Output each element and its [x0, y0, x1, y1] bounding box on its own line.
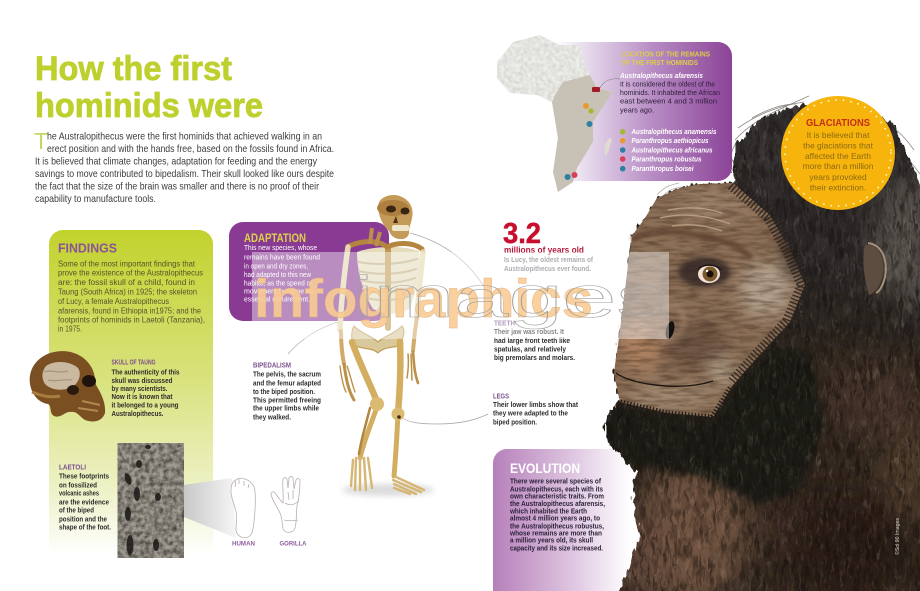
- species legend: Australopithecus anamensis: [631, 129, 717, 136]
- callout: glaciations: the glaciations that: [803, 140, 874, 150]
- legs caption: [493, 394, 578, 426]
- callout: glaciations: affected the Earth: [805, 151, 871, 161]
- Laetoli caption: on fossilized: [59, 480, 97, 490]
- 3.2 million years callout: Is Lucy, the oldest remains of: [504, 255, 593, 264]
- ribcage: [357, 247, 420, 328]
- findings text: are: the fossil skull of a child, found in: [58, 278, 195, 287]
- species legend: Paranthropus boisei: [632, 166, 694, 173]
- findings text: footprints of hominids in Laetoli (Tanzania),: [58, 316, 205, 324]
- skull of Taung caption: it belonged to a young: [112, 400, 179, 410]
- afarensis note: hominids. It inhabited the African: [620, 88, 720, 97]
- callout: glaciations: their extinction.: [810, 182, 866, 192]
- skull of Taung caption: SKULL OF TAUNG: [112, 360, 156, 366]
- adaptation text: essential requirement.: [244, 294, 310, 304]
- pelvis: [352, 326, 404, 353]
- adaptation text: had adapted to this new: [244, 270, 311, 279]
- findings text: afarensis, found in Ethiopia in1975; and the: [58, 306, 202, 316]
- skull of Taung caption: skull was discussed: [112, 376, 173, 385]
- afarensis note: [619, 71, 720, 114]
- species legend: Paranthropus aethiopicus: [632, 138, 709, 145]
- evolution text: almost 4 million years ago, to: [510, 514, 600, 522]
- ear: [863, 243, 886, 295]
- evolution text: [509, 476, 605, 552]
- findings text: [58, 260, 205, 334]
- findings heading: FINDINGS: [58, 240, 117, 256]
- beard and dark neck: [600, 345, 825, 505]
- adaptation text: [244, 243, 320, 304]
- Laetoli caption: position and the: [59, 514, 107, 524]
- skull of Taung caption: [112, 360, 180, 418]
- face skin: [614, 183, 805, 417]
- adaptation text: in open and dry zones,: [244, 262, 308, 270]
- beard fringe over the chin: [620, 387, 733, 419]
- findings text: prove the existence of the Australopithecus: [58, 268, 203, 278]
- adaptation text: This new species, whose: [244, 243, 317, 252]
- foot and hand labels: [232, 540, 307, 548]
- evolution text: Australopithecus, each with its: [510, 484, 603, 494]
- foot and hand labels: HUMAN: [232, 540, 255, 548]
- afarensis note: It is considered the oldest of the: [620, 80, 715, 88]
- findings text: of Lucy, a female Australopithecus: [58, 297, 169, 306]
- map heading: [621, 52, 710, 67]
- shoulders and arms: [340, 242, 423, 400]
- species legend: Paranthropus robustus: [632, 156, 702, 164]
- 3.2 million years callout: [503, 218, 593, 273]
- map location dots: [565, 87, 600, 180]
- bipedalism caption: they walked.: [253, 412, 291, 422]
- leader lines: [288, 233, 490, 424]
- afarensis note: Australopithecus afarensis: [619, 71, 703, 80]
- 3.2 million years callout: millions of years old: [504, 245, 584, 255]
- panel: evolution: [493, 449, 630, 591]
- feet: [351, 458, 424, 494]
- legs caption: LEGS: [493, 394, 509, 400]
- species legend: Australopithecus africanus: [631, 148, 713, 154]
- intro text block: the fact that the size of the brain was smaller and there is no proof of their: [35, 182, 320, 192]
- intro text block: erect position and with the hands free, based on the fossils found in Africa.: [47, 144, 334, 155]
- watermark: infographics: [254, 269, 593, 329]
- panel: findings: [49, 230, 213, 556]
- panel: location map: [495, 33, 732, 193]
- bipedalism caption: [253, 362, 321, 422]
- Laetoli caption: of the biped: [59, 506, 94, 514]
- bipedalism caption: and the femur adapted: [253, 378, 321, 388]
- teeth caption: [494, 320, 575, 362]
- 3.2 million years callout: 3.2: [503, 218, 541, 250]
- teeth caption: spatulas, and relatively: [494, 344, 567, 354]
- title: How the first: [35, 50, 232, 88]
- Laetoli caption: LAETOLI: [59, 464, 86, 472]
- afarensis note: east between 4 and 3 million: [620, 96, 717, 106]
- photo credit: ©Sol 90 Images: [894, 517, 901, 555]
- findings text: in 1975.: [58, 324, 82, 334]
- callout: glaciations: GLACIATIONS: [806, 117, 870, 129]
- skull of Taung caption: The authenticity of this: [112, 368, 180, 376]
- intro text block: he Australopithecus were the first hominids that achieved walking in an: [47, 132, 322, 142]
- afarensis note: years ago.: [620, 106, 654, 114]
- callout: glaciations: more than a million: [803, 161, 874, 171]
- adaptation text: remains have been found: [244, 252, 320, 262]
- title: hominids were: [35, 87, 263, 125]
- skull of Taung caption: Now it is known that: [112, 392, 173, 401]
- adaptation text: movement became an: [244, 286, 314, 296]
- skull: [378, 195, 413, 239]
- head and body fur: [590, 80, 920, 591]
- callout: glaciations: years provoked: [809, 172, 867, 182]
- map heading: LOCATION OF THE REMAINS: [621, 52, 710, 58]
- findings text: Some of the most important findings that: [58, 260, 196, 268]
- intro text block: savings to move contributed to bipedalism. Their skull looked like ours despite: [35, 169, 334, 180]
- skull of Taung caption: by many scientists.: [112, 384, 168, 393]
- hair wisps: [657, 96, 920, 197]
- intro text block: T: [34, 128, 48, 154]
- Laetoli caption: shape of the foot.: [59, 522, 111, 532]
- icon: skull of Taung: [30, 351, 105, 422]
- teeth caption: had large front teeth like: [494, 336, 570, 345]
- bipedalism caption: BIPEDALISM: [253, 362, 291, 370]
- hairline fringe over the face edge: [733, 183, 805, 385]
- evolution text: the Australopithecus afarensis,: [510, 499, 605, 508]
- adaptation heading: ADAPTATION: [244, 231, 306, 245]
- illustration: Australopithecus head and torso: [590, 80, 920, 591]
- photo: Laetoli footprints: [118, 443, 184, 558]
- brow ridge: [632, 231, 752, 258]
- bipedalism caption: the upper limbs while: [253, 404, 319, 412]
- 3.2 million years callout: Australopithecus ever found.: [504, 264, 591, 273]
- Laetoli caption: [59, 464, 111, 532]
- legs caption: Their lower limbs show that: [493, 400, 578, 409]
- teeth caption: Their jaw was robust. It: [494, 327, 564, 336]
- evolution heading: EVOLUTION: [510, 461, 580, 476]
- evolution text: the Australopithecus robustus,: [510, 522, 604, 530]
- map of Africa: [495, 33, 620, 193]
- skull of Taung caption: Australopithecus.: [112, 409, 164, 418]
- Laetoli caption: are the evidence: [59, 498, 109, 506]
- species legend: [620, 129, 717, 173]
- evolution text: capacity and its size increased.: [510, 544, 603, 552]
- Laetoli caption: volcanic ashes: [59, 488, 99, 498]
- watermark: images: [352, 265, 665, 330]
- mouth: [616, 373, 713, 386]
- map heading: OF THE FIRST HOMINIDS: [621, 60, 698, 67]
- intro text block: [34, 128, 334, 205]
- evolution text: a million years old, its skull: [510, 536, 593, 544]
- teeth caption: big premolars and molars.: [494, 353, 575, 362]
- adaptation text: habitat, as the speed of: [244, 278, 313, 288]
- legs caption: they were adapted to the: [493, 408, 568, 418]
- icon: gorilla hand: [271, 476, 300, 532]
- evolution text: own characteristic traits. From: [510, 492, 604, 500]
- callout: glaciations: It is believed that: [807, 130, 870, 140]
- evolution text: There were several species of: [510, 476, 601, 486]
- skeleton: [340, 195, 434, 496]
- icon: human foot: [231, 478, 255, 538]
- nose: [660, 303, 684, 340]
- findings text: Taung (South Africa) in 1925; the skeleton: [58, 288, 197, 296]
- intro text block: capability to manufacture tools.: [35, 194, 156, 205]
- foot and hand labels: GORILLA: [280, 540, 307, 548]
- bipedalism caption: This permitted freeing: [253, 396, 321, 404]
- bipedalism caption: The pelvis, the sacrum: [253, 370, 321, 378]
- eye: [678, 257, 730, 287]
- legs caption: biped position.: [493, 418, 537, 426]
- intro text block: It is believed that climate changes, adaptation for feeding and the energy: [35, 156, 318, 168]
- callout: glaciations: [781, 96, 895, 210]
- title: [35, 50, 263, 125]
- legs: [352, 341, 400, 476]
- evolution text: whose remains are more than: [509, 528, 602, 538]
- panel: adaptation: [229, 222, 389, 321]
- teeth caption: TEETH: [494, 320, 515, 328]
- footprint magnifying cone: [184, 478, 236, 538]
- watermark: [252, 252, 669, 339]
- evolution text: which inhabited the Earth: [509, 506, 587, 516]
- Laetoli caption: These footprints: [59, 472, 109, 480]
- bipedalism caption: to the biped position.: [253, 387, 315, 396]
